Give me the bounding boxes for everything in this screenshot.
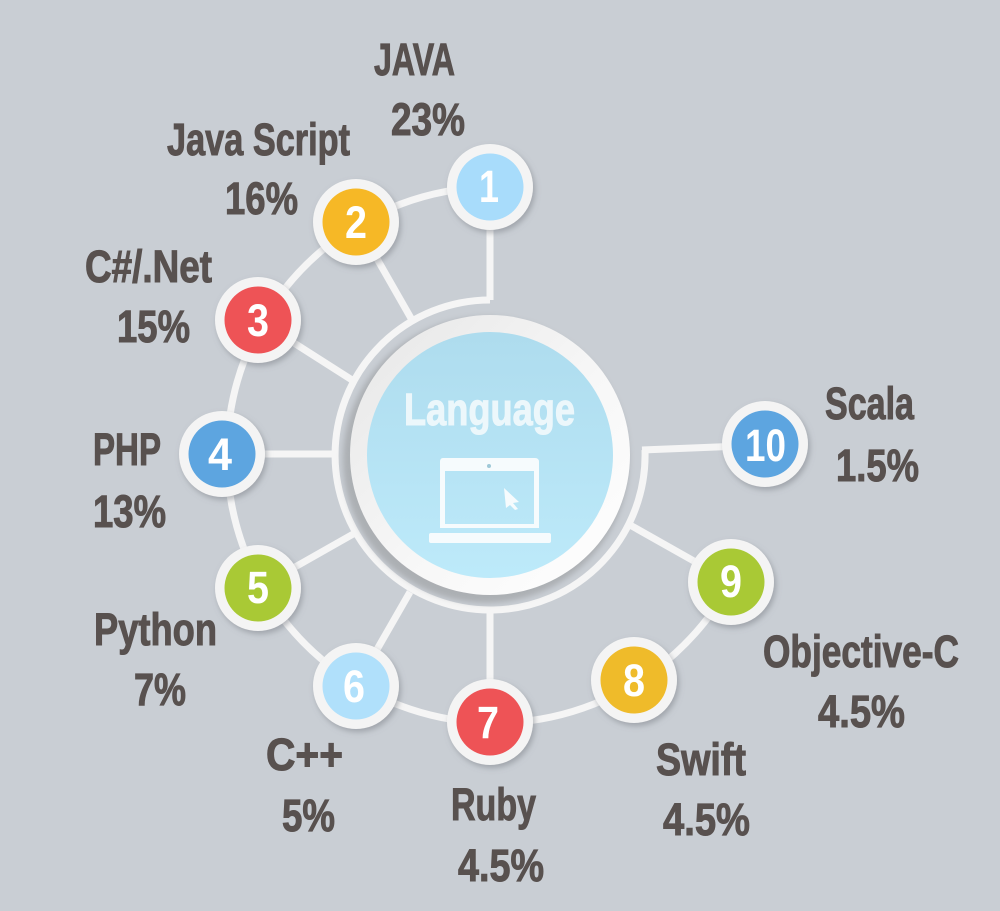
label: Objective-C 4.5%: 4.5% (818, 686, 905, 737)
node 4: 4 (208, 429, 232, 480)
label: JAVA 23% (374, 34, 465, 145)
label: Ruby 4.5% (451, 779, 544, 891)
label: C#/.Net 15%: C#/.Net (85, 241, 212, 292)
node 3 (215, 277, 301, 363)
node 9 (688, 539, 774, 625)
label: Swift 4.5%: 4.5% (663, 794, 750, 845)
label: Java Script 16%: Java Script (167, 114, 350, 165)
label: C++ 5%: C++ (266, 729, 343, 780)
node 5: 5 (247, 562, 269, 613)
node 8: 8 (623, 655, 645, 706)
label: Scala 1.5%: 1.5% (836, 440, 919, 491)
node 4 (179, 411, 265, 497)
node 6 (313, 643, 399, 729)
central hub (343, 315, 630, 603)
connector network (222, 187, 765, 723)
label: JAVA 23%: 23% (391, 94, 465, 145)
label: Ruby 4.5%: 4.5% (458, 840, 544, 891)
label: Scala 1.5% (825, 378, 919, 491)
label: Swift 4.5% (656, 734, 750, 845)
label: JAVA 23%: JAVA (374, 34, 455, 85)
label: PHP 13%: 13% (93, 486, 166, 537)
node 10 (722, 401, 808, 487)
node 9: 9 (720, 556, 742, 607)
node 2 (313, 179, 399, 265)
icon: laptop (429, 458, 551, 543)
node 1 (447, 144, 533, 230)
hub title: Language (404, 384, 575, 435)
label: Python 7% (94, 604, 217, 715)
node 10: 10 (745, 420, 786, 471)
node 3: 3 (247, 295, 269, 346)
label: C++ 5%: 5% (282, 790, 335, 841)
label: PHP 13% (93, 424, 166, 537)
label: Python 7%: 7% (134, 664, 186, 715)
node 7 (447, 679, 533, 765)
label: Python 7%: Python (94, 604, 217, 655)
label: Scala 1.5%: Scala (825, 378, 915, 429)
label: Java Script 16%: 16% (225, 173, 298, 224)
label: PHP 13%: PHP (93, 424, 161, 475)
label: Java Script 16% (167, 114, 350, 224)
label: C#/.Net 15% (85, 241, 212, 352)
label: C#/.Net 15%: 15% (117, 301, 190, 352)
node 7: 7 (477, 697, 499, 748)
node 2: 2 (345, 197, 367, 248)
node 5 (215, 545, 301, 631)
node 6: 6 (343, 661, 365, 712)
label: Objective-C 4.5% (763, 626, 959, 737)
label: C++ 5% (266, 729, 343, 841)
label: Ruby 4.5%: Ruby (451, 779, 536, 830)
node 8 (591, 637, 677, 723)
label: Swift 4.5%: Swift (656, 734, 746, 785)
node 1: 1 (479, 161, 499, 212)
